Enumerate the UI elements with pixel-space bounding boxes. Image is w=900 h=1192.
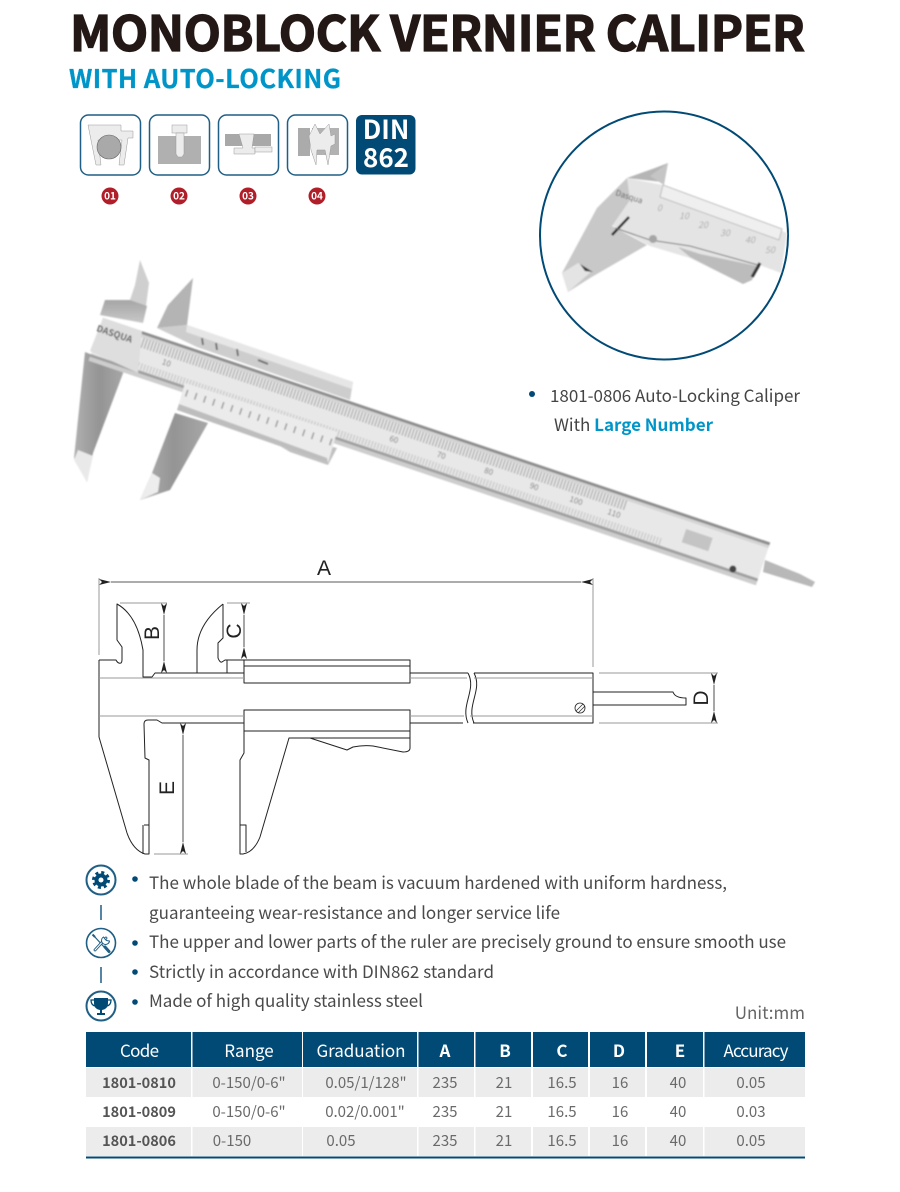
row 1801-0806: 235: [433, 1130, 457, 1151]
row 1801-0806: 40: [670, 1130, 686, 1151]
beam: 70: [435, 449, 448, 462]
dimension D: D: [690, 690, 713, 706]
badge 02: 02: [173, 188, 185, 202]
row 1801-0810: 21: [496, 1072, 512, 1093]
bullet 2: The upper and lower parts of the ruler are precisely ground to ensure smooth use: [149, 928, 786, 953]
row 1801-0806: 0.05: [326, 1130, 356, 1151]
badge 03: 03: [242, 188, 254, 202]
beam: 100: [568, 494, 585, 508]
dimension B: [120, 603, 167, 661]
row 1801-0809: 0.03: [736, 1101, 766, 1122]
row shading: [86, 1068, 805, 1156]
row 1801-0806: 1801-0806: [102, 1130, 176, 1151]
badge 04: 04: [311, 188, 323, 202]
badge 03: [240, 188, 256, 204]
main caliper photo: DASQUA: [95, 322, 134, 346]
row 1801-0810: 0.05: [736, 1072, 766, 1093]
row 1801-0806: 0.05: [736, 1130, 766, 1151]
dimension drawing: [99, 557, 718, 854]
number badges: [102, 188, 326, 204]
table header: [86, 1032, 805, 1067]
inset circle: large number caliper detail: 30: [720, 226, 731, 239]
bullet 3: Strictly in accordance with DIN862 standard: [149, 958, 494, 983]
dimension A: A: [317, 557, 331, 580]
bullet 4: Made of high quality stainless steel: [149, 987, 423, 1012]
row 1801-0809: 0-150/0-6": [212, 1101, 286, 1122]
row 1801-0810: 16: [612, 1072, 628, 1093]
icon: trophy: [86, 992, 116, 1020]
icon: outside jaw measuring: [80, 115, 140, 175]
beam: [89, 318, 770, 585]
badge 01: [102, 188, 118, 204]
dimension C: [223, 603, 250, 647]
note line 2: With Large Number: [554, 411, 714, 436]
table header: Graduation: [316, 1037, 406, 1062]
vernier slider: [177, 383, 337, 463]
row 1801-0810: 0.05/1/128": [325, 1072, 407, 1093]
dimension E: [154, 735, 188, 854]
feature icons row: [80, 115, 348, 175]
beam: 10: [160, 356, 173, 370]
dimension E: E: [156, 781, 179, 795]
upper slider: [157, 325, 353, 400]
slider upper jaw: [157, 278, 193, 328]
fixed head: [90, 318, 142, 373]
fixed lower jaw: [74, 352, 125, 482]
dimension A: [99, 557, 593, 667]
inset circle: large number caliper detail: 0: [657, 201, 663, 214]
beam: 90: [528, 480, 541, 494]
row 1801-0809: [102, 1101, 766, 1122]
table header: E: [675, 1037, 685, 1062]
table header: D: [613, 1037, 625, 1062]
row 1801-0810: 0-150/0-6": [212, 1072, 286, 1093]
note bullet: [529, 391, 535, 397]
DIN 862 badge: DIN: [363, 110, 409, 147]
row 1801-0809: 40: [670, 1101, 686, 1122]
row 1801-0809: 1801-0809: [102, 1101, 176, 1122]
table header: C: [556, 1037, 568, 1062]
row 1801-0806: 16: [612, 1130, 628, 1151]
specification table: [86, 1032, 805, 1158]
row 1801-0810: 1801-0810: [102, 1072, 176, 1093]
row 1801-0809: 235: [433, 1101, 457, 1122]
row 1801-0809: 16: [612, 1101, 628, 1122]
depth rod: [763, 560, 815, 587]
subtitle: WITH AUTO-LOCKING: [69, 59, 341, 96]
dimension D: [599, 673, 718, 723]
icon: inside step: [218, 115, 278, 175]
main caliper photo: [74, 260, 815, 587]
inset circle: large number caliper detail: Dasqua: [614, 187, 644, 207]
inset circle: large number caliper detail: 10: [679, 209, 690, 222]
row 1801-0806: 0-150: [213, 1130, 251, 1151]
badge 01: 01: [104, 188, 116, 202]
row 1801-0809: 16.5: [547, 1101, 577, 1122]
beam inner lines: [99, 678, 593, 716]
unit note: Unit:mm: [735, 999, 805, 1024]
bullet 1: The whole blade of the beam is vacuum hardened with uniform hardness,: [149, 869, 727, 894]
icon: tools: [86, 928, 116, 958]
row 1801-0810: 235: [433, 1072, 457, 1093]
table header: Code: [120, 1037, 159, 1062]
row 1801-0806: 16.5: [547, 1130, 577, 1151]
row 1801-0809: 21: [496, 1101, 512, 1122]
badge 04: [308, 188, 326, 204]
icon: depth pin: [150, 115, 210, 175]
beam: 60: [388, 433, 400, 446]
table header: B: [499, 1037, 511, 1062]
inset circle: large number caliper detail: 20: [698, 218, 709, 231]
icon: jaw section: [288, 115, 348, 175]
beam: 110: [606, 506, 623, 521]
product note: [529, 382, 800, 436]
row 1801-0806: [102, 1130, 766, 1151]
caliper outline: [99, 604, 686, 854]
note line 1: 1801-0806 Auto-Locking Caliper: [550, 382, 800, 407]
fixed upper jaw: [130, 260, 149, 306]
inset circle: large number caliper detail: 40: [745, 233, 756, 246]
table header: Range: [224, 1037, 274, 1062]
row 1801-0810: [102, 1072, 766, 1093]
row 1801-0806: 21: [496, 1130, 512, 1151]
inset circle: large number caliper detail: 50: [765, 243, 776, 256]
badge 02: [170, 188, 188, 204]
row 1801-0810: 40: [670, 1072, 686, 1093]
icon: gear: [86, 866, 116, 894]
row 1801-0810: 16.5: [547, 1072, 577, 1093]
dimension C: C: [223, 623, 246, 639]
thumb grip: [250, 428, 337, 465]
bullet 1: guaranteeing wear-resistance and longer service life: [149, 899, 560, 924]
dimension B: B: [141, 626, 164, 640]
slider lower jaw: [140, 413, 208, 500]
DIN 862 badge: 862: [363, 138, 409, 175]
bullet 1: [132, 869, 727, 924]
row 1801-0809: 0.02/0.001": [325, 1101, 405, 1122]
table header: A: [439, 1037, 451, 1062]
DIN 862 badge: [356, 110, 416, 175]
beam: 80: [483, 465, 495, 478]
inset circle: large number caliper detail: [540, 112, 788, 360]
feature icon column: [86, 866, 116, 1020]
feature list: [132, 869, 786, 1012]
table header: Accuracy: [724, 1037, 789, 1062]
